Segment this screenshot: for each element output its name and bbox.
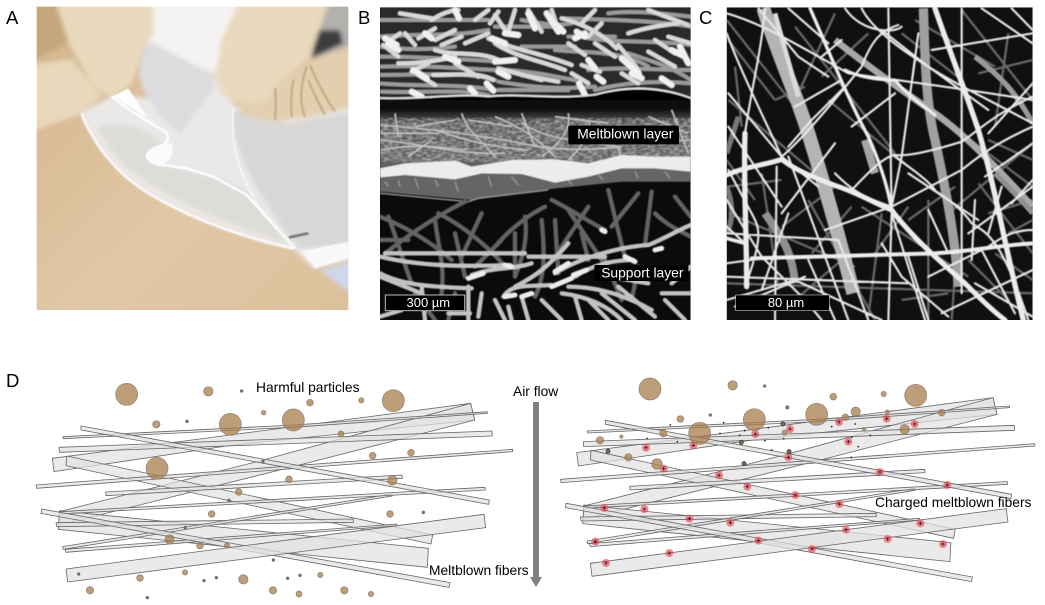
- top white mask sheet: [147, 0, 242, 75]
- label: Meltblown layer: Meltblown layer: [577, 126, 674, 142]
- rim along the mask: [82, 113, 293, 248]
- dark gap and meltblown layer: [380, 88, 691, 178]
- schematic: uncharged meltblown fibers with particles passing: [36, 383, 513, 599]
- glove: left upper finger: [55, 0, 153, 95]
- glove wrinkles: [275, 65, 335, 120]
- small grey particles (left): [77, 389, 425, 599]
- label: Harmful particles: Harmful particles: [256, 380, 360, 395]
- arrow: air flow direction: [530, 402, 542, 587]
- thick bright fibers: [727, 8, 1033, 320]
- panel B: SEM cross-section of mask layers: [380, 7, 691, 320]
- glove: wrinkled wrist: [238, 50, 348, 124]
- bright edge of upper layer: [380, 89, 691, 99]
- glove: right thumb: [215, 0, 330, 103]
- glove: background shadows: [36, 6, 68, 59]
- bright white band in meltblown layer: [380, 155, 691, 183]
- dark textured underside: [595, 182, 610, 184]
- scale bar: 80 µm: [736, 295, 829, 311]
- equipment behind right hand: [311, 6, 348, 56]
- blue backing at corner: [319, 260, 348, 294]
- panel D label: D: [6, 370, 19, 391]
- upper nonwoven layer: [380, 7, 691, 99]
- label: Meltblown fibers: Meltblown fibers: [429, 563, 529, 578]
- dim background fibers: [727, 10, 1033, 320]
- lower support layer: [380, 190, 691, 320]
- panel C: SEM image of meltblown fibers: [727, 7, 1033, 320]
- label: Support layer: Support layer: [601, 264, 684, 280]
- scale bar: 80 µm: 80 µm: [768, 295, 804, 310]
- wide grey fibers: [727, 8, 1033, 293]
- harmful particles (right): [596, 378, 945, 469]
- schematic: charged meltblown fibers capturing particles: [560, 378, 1035, 582]
- tiny black nanoparticles: [646, 422, 871, 458]
- mask hem and lettering: [302, 242, 348, 268]
- bright thin fibers: [727, 8, 1033, 320]
- small grey particles (right): [709, 384, 789, 417]
- label: Air flow: Air flow: [513, 384, 558, 399]
- fibers (right): [560, 398, 1035, 582]
- scale bar: 300 µm: [385, 295, 465, 311]
- panel B label: B: [358, 7, 370, 28]
- panel C label: C: [699, 7, 712, 28]
- label: Charged meltblown fibers: Charged meltblown fibers: [875, 495, 1032, 510]
- fibers (left): [36, 403, 513, 587]
- wood table background: [36, 41, 348, 310]
- mask body: [82, 95, 360, 268]
- white folded edges: [114, 88, 150, 120]
- electrostatic charges: [591, 415, 951, 567]
- glove: left lower finger: [36, 58, 102, 132]
- captured dark-rimmed particles: [606, 422, 791, 466]
- peeled translucent filter layer: [196, 76, 239, 186]
- harmful particles (left): [86, 383, 414, 597]
- scale bar: 300 µm: 300 µm: [407, 295, 450, 310]
- panel A: photo of a mask being peeled apart: [36, 6, 348, 310]
- panel A label: A: [6, 7, 19, 28]
